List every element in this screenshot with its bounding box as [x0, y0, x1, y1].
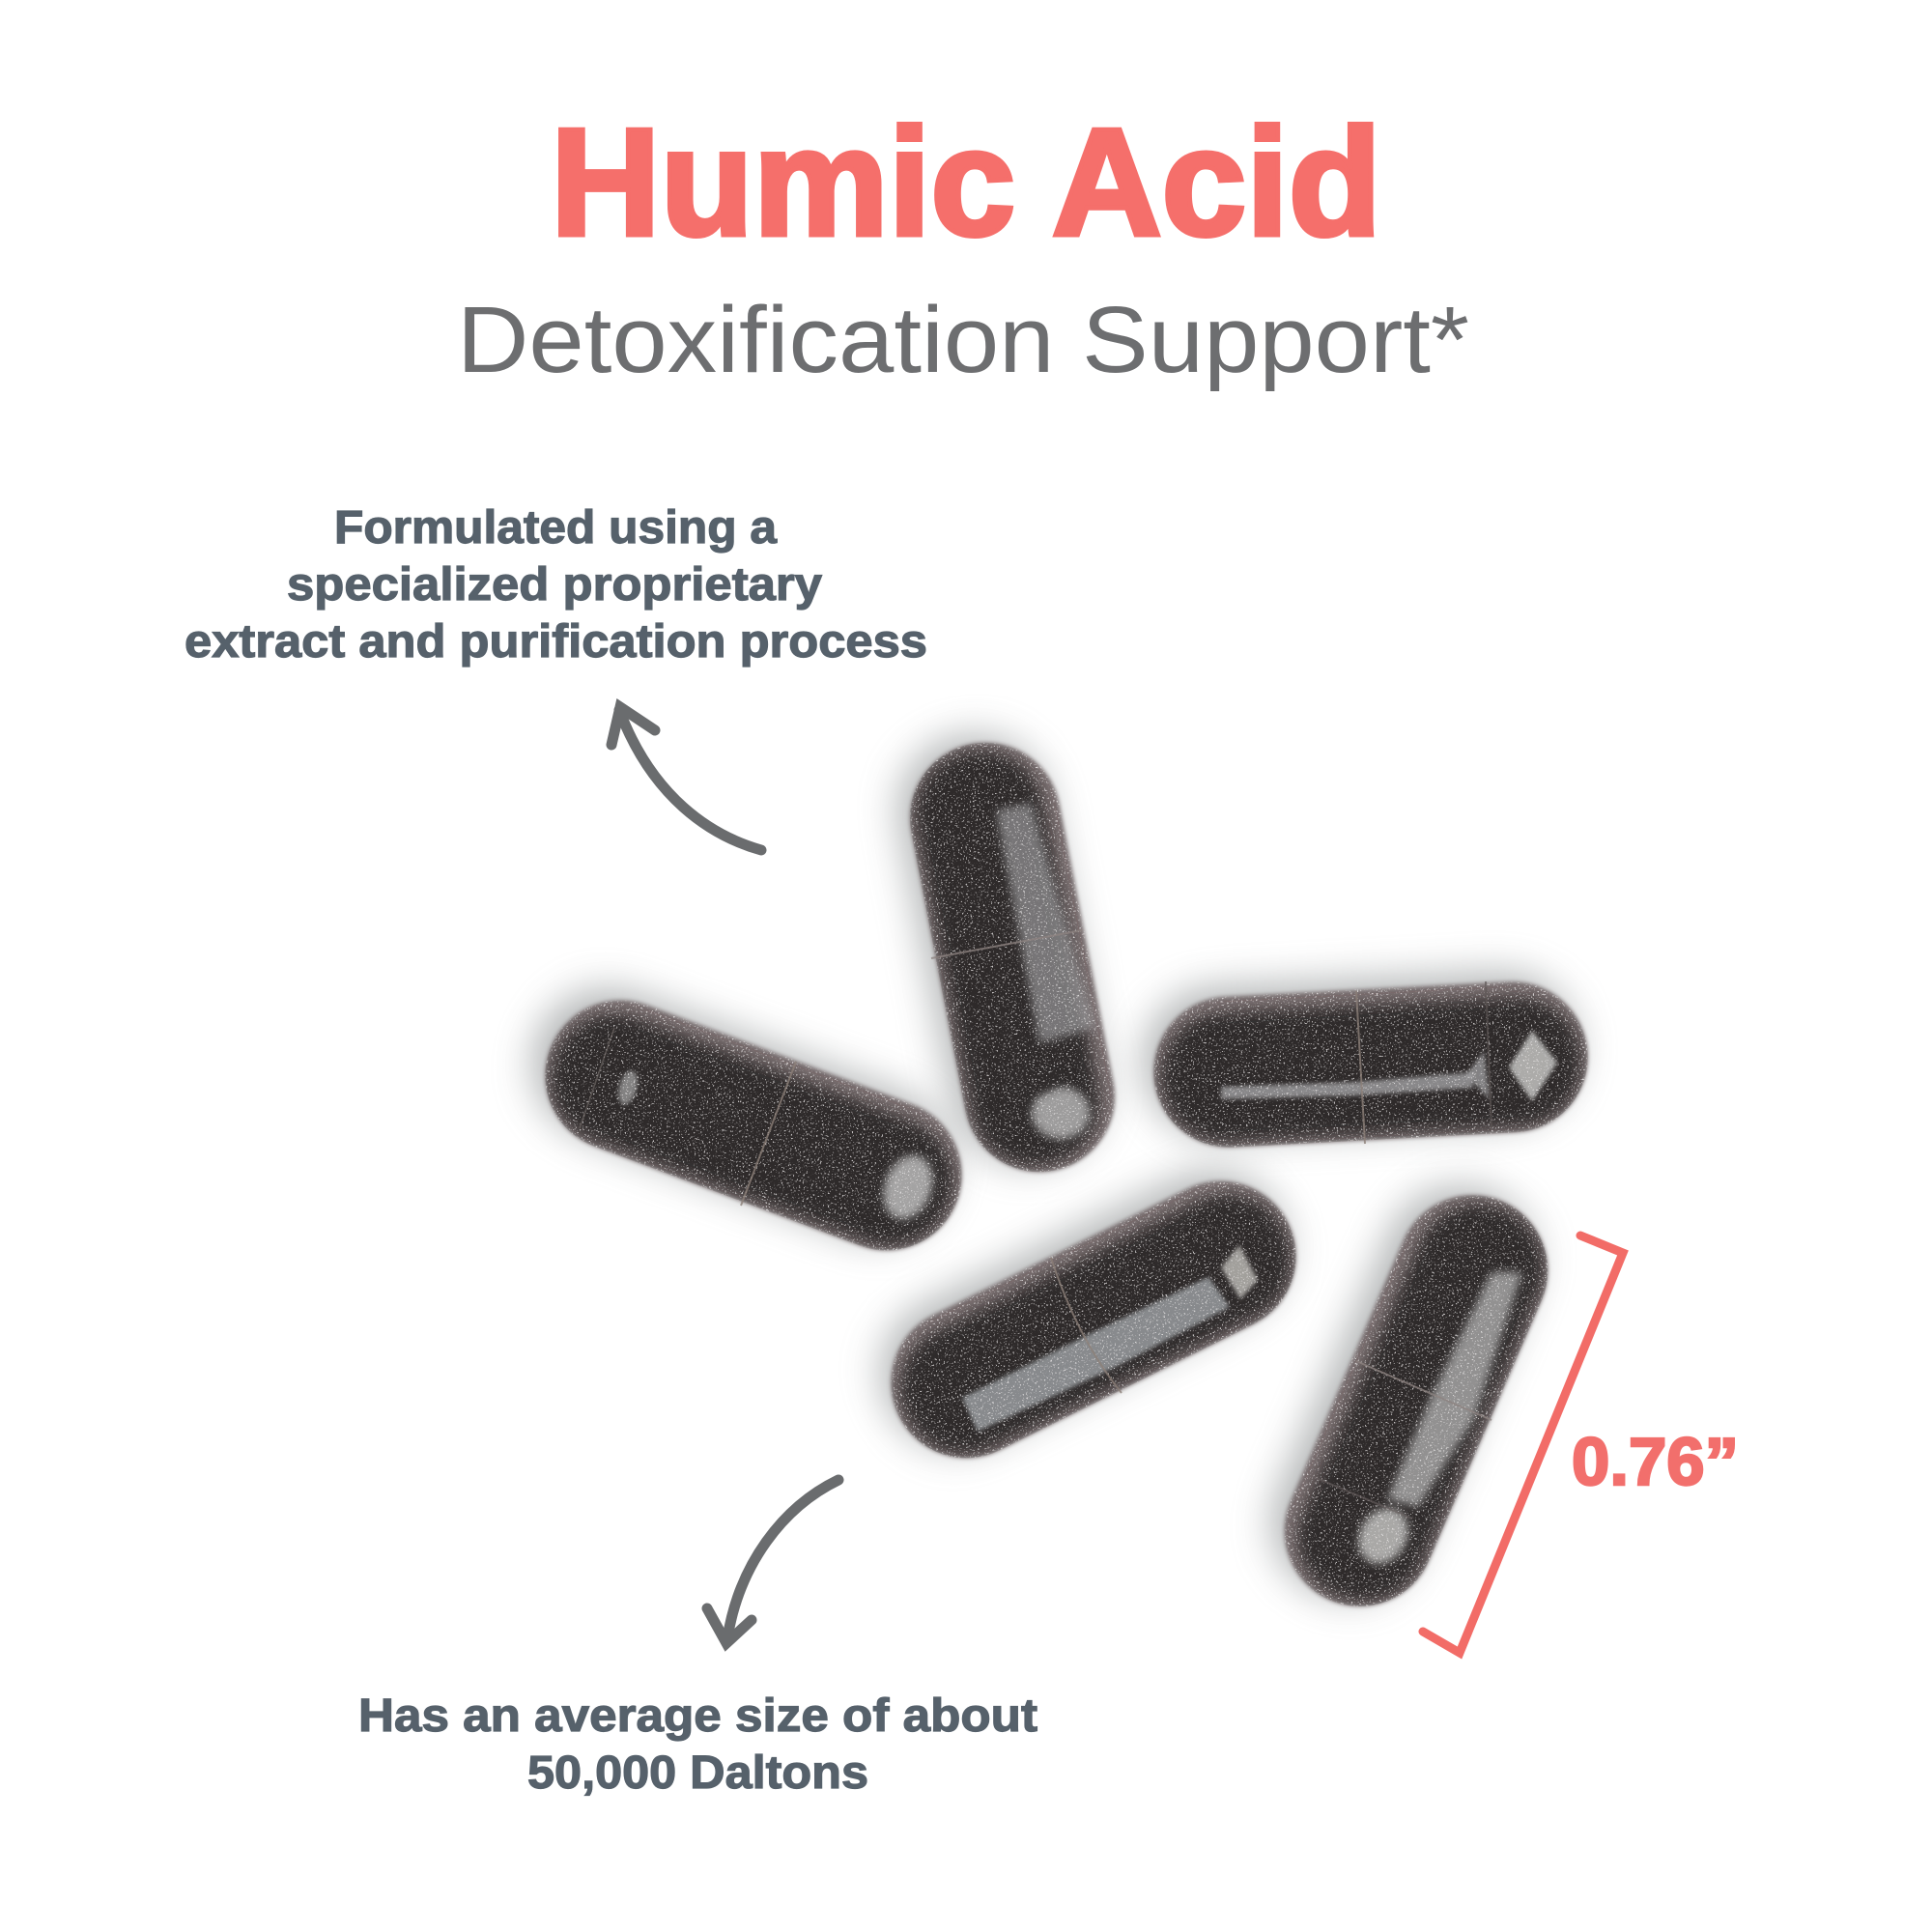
text block: formulation callout: [185, 502, 927, 668]
capsule: right: [1139, 968, 1592, 1151]
title: Humic Acid: [551, 98, 1381, 268]
text block: formulation callout: extract and purification process: [185, 616, 927, 668]
capsule: lower right: [1248, 1163, 1572, 1630]
text block: size callout: 50,000 Daltons: [527, 1747, 868, 1799]
subtitle: Detoxification Support*: [457, 287, 1469, 392]
text block: formulation callout: Formulated using a: [334, 502, 777, 554]
size label: 0.76”: [1572, 1424, 1739, 1499]
arrow: up toward formulation callout: [611, 707, 761, 850]
text block: size callout: [358, 1690, 1037, 1799]
text block: size callout: Has an average size of about: [358, 1690, 1037, 1742]
capsule: left: [511, 967, 983, 1272]
capsule: top: [886, 722, 1127, 1185]
arrow: down toward size callout: [707, 1480, 838, 1643]
size bracket: [1423, 1236, 1623, 1653]
text block: formulation callout: specialized proprietary: [287, 559, 822, 611]
capsule: lower middle: [856, 1146, 1321, 1484]
